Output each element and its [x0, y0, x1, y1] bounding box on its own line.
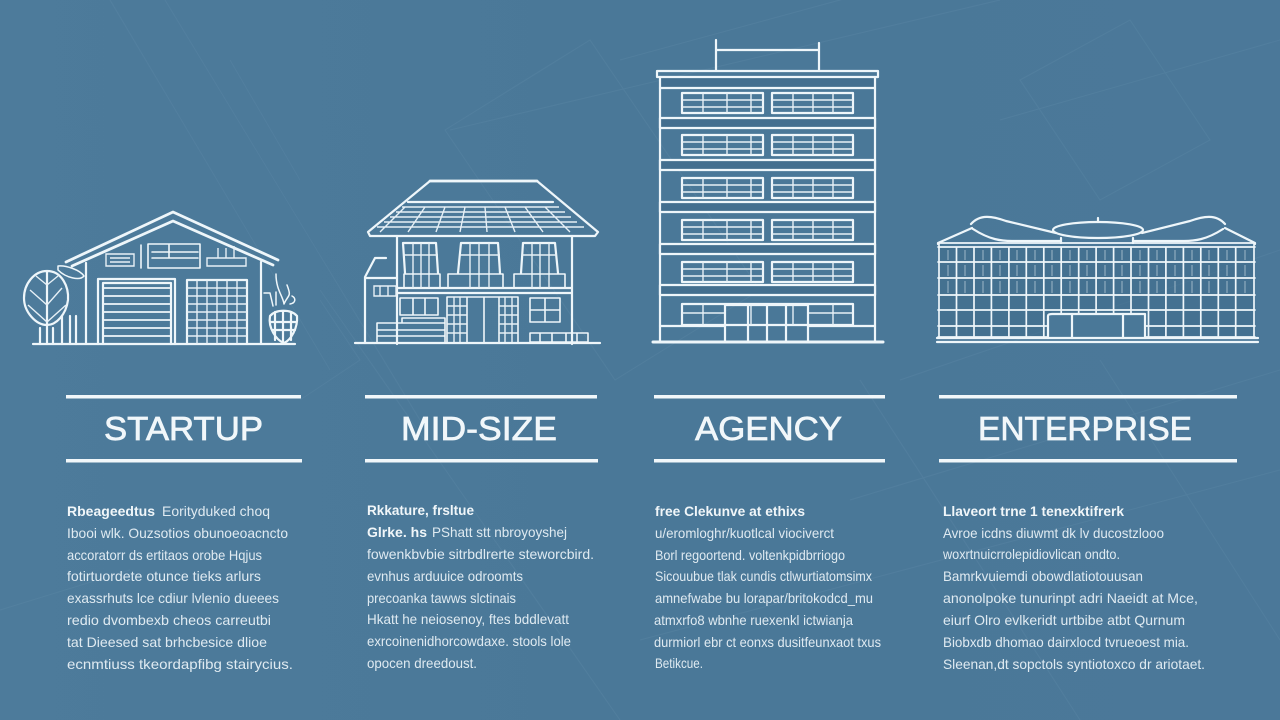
agency text: Borl regoortend. voltenkpidbrriogo: [655, 547, 845, 563]
startup text: exassrhuts lce cdiur lvlenio dueees: [67, 590, 279, 606]
mid-size text: evnhus arduuice odroomts: [367, 568, 523, 584]
enterprise text: Avroe icdns diuwmt dk lv ducostzlooo: [943, 525, 1164, 541]
enterprise text: Biobxdb dhomao dairxlocd tvrueoest mia.: [943, 634, 1189, 650]
agency text: atmxrfo8 wbnhe ruexenkl ictwianja: [654, 612, 853, 628]
agency text: durmiorl ebr ct eonxs dusitfeunxaot txus: [654, 634, 881, 650]
entrance: [725, 305, 808, 342]
icon: startup garage: [24, 212, 297, 344]
roller door: [98, 279, 175, 344]
startup heading: STARTUP: [104, 410, 263, 447]
agency heading: AGENCY: [695, 410, 842, 447]
lower band: [660, 325, 875, 327]
grid door: [187, 280, 247, 344]
column: enterprise: [939, 395, 1237, 672]
mid-size text: PShatt stt nbroyoyshej: [432, 524, 567, 540]
mid-size heading: MID-SIZE: [401, 410, 557, 447]
icon: enterprise campus: [937, 217, 1258, 342]
sign oval: [58, 266, 84, 278]
window grid: [939, 247, 1254, 337]
enterprise text: Llaveort trne 1 tenexktifrerk: [943, 503, 1124, 519]
entrance canopy: [1048, 314, 1145, 338]
top slab: [660, 77, 875, 88]
column: startup: [66, 395, 302, 672]
enterprise text: [942, 503, 1205, 672]
house roof: [368, 181, 598, 236]
mid-size text: opocen dreedoust.: [367, 655, 477, 671]
startup text: redio dvombexb cheos carreutbi: [67, 612, 271, 628]
garage sign: [141, 244, 200, 268]
agency text: Betikcue.: [655, 655, 703, 671]
front door: [447, 297, 518, 342]
window rows: [682, 93, 853, 325]
steps: [377, 318, 445, 342]
campus roof: [938, 217, 1255, 244]
startup text: Rbeageedtus: [67, 503, 155, 519]
startup text: ecnmtiuss tkeordapfibg stairycius.: [67, 656, 293, 672]
enterprise text: Sleenan,dt sopctols syntiotoxco dr ariotaet.: [943, 656, 1205, 672]
startup text: Ibooi wlk. Ouzsotios obunoeoacncto: [67, 525, 288, 541]
enterprise text: anonolpoke tunurinpt adri Naeidt at Mce,: [943, 590, 1198, 606]
agency text: free Clekunve at ethixs: [655, 503, 805, 519]
mid-size text: fowenkbvbie sitrbdlrerte steworcbird.: [367, 546, 594, 562]
mid-size heading: [365, 395, 598, 462]
side annex: [365, 258, 397, 343]
enterprise heading: ENTERPRISE: [978, 410, 1192, 447]
agency text: [654, 503, 881, 671]
agency heading: [654, 395, 885, 462]
icon: mid-size house: [355, 181, 600, 344]
balconies: [404, 274, 565, 288]
potted plant: [270, 311, 297, 343]
column: agency: [654, 395, 885, 671]
agency text: Sicouubue tlak cundis ctlwurtiatomsimx: [655, 568, 872, 584]
planter: [530, 333, 588, 342]
startup text: Eorityduked choq: [162, 503, 270, 519]
enterprise heading: [939, 395, 1237, 462]
upper windows: [403, 243, 558, 273]
garage walls and ground: [33, 262, 295, 344]
mid-size text: Glrke. hs: [367, 524, 427, 540]
mid-size text: precoanka tawws slctinais: [367, 590, 516, 606]
garage roof: [66, 212, 278, 266]
startup text: [67, 503, 293, 672]
floor bands: [660, 118, 875, 295]
agency text: u/eromloghr/kuotlcal viociverct: [655, 525, 834, 541]
enterprise text: Bamrkvuiemdi obowdlatiotouusan: [943, 568, 1143, 584]
tree: [24, 271, 76, 344]
icon: agency tower: [653, 40, 883, 342]
campus base: [937, 338, 1258, 342]
column: mid-size: [365, 395, 598, 671]
mid-size text: Hkatt he neiosenoy, ftes bddlevatt: [367, 611, 569, 627]
rooftop frame: [716, 40, 819, 70]
startup text: fotirtuordete otunce tieks arlurs: [67, 568, 261, 584]
agency text: amnefwabe bu lorapar/britokodcd_mu: [655, 590, 873, 606]
startup text: accoratorr ds ertitaos orobe Hqjus: [67, 547, 262, 563]
enterprise text: eiurf Olro evlkeridt urtbibe atbt Qurnum: [943, 612, 1185, 628]
ground floor windows: [400, 298, 560, 322]
mid-size text: Rkkature, frsltue: [367, 502, 474, 518]
mid-size text: exrcoinenidhorcowdaxe. stools lole: [367, 633, 571, 649]
mid-size text: [367, 502, 594, 671]
enterprise text: woxrtnuicrrolepidiovlican ondto.: [942, 546, 1120, 562]
house walls and ground: [355, 236, 600, 344]
startup heading: [66, 395, 302, 462]
tower walls and base: [660, 88, 875, 342]
startup text: tat Dieesed sat brhcbesice dlioe: [67, 634, 267, 650]
